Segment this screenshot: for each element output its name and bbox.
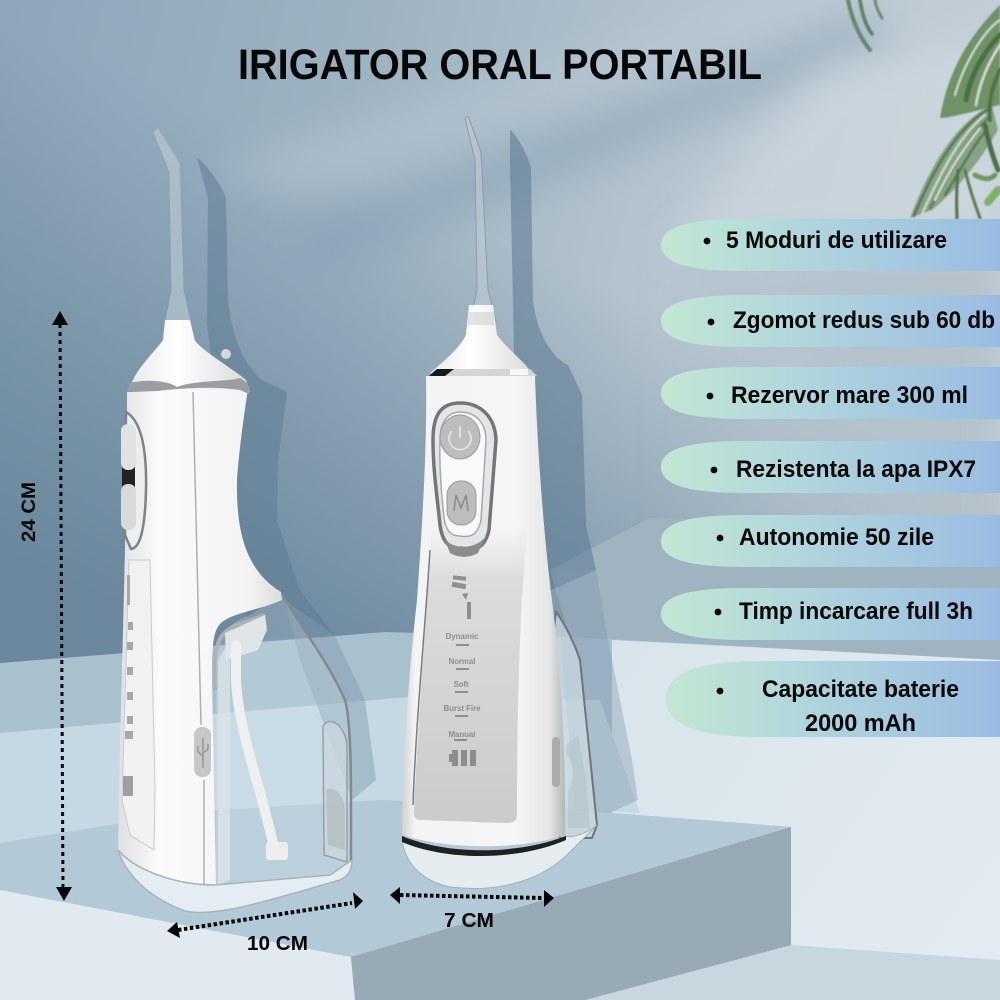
depth label: 7 CM	[444, 910, 494, 932]
tank behind body	[545, 612, 597, 838]
knob	[221, 349, 231, 359]
height label: 24 CM	[19, 482, 40, 542]
feature pill 4: Rezistenta la apa IPX7	[736, 456, 976, 483]
shadow of left device on wall	[197, 158, 335, 640]
inner connector	[225, 615, 267, 660]
mode labels	[444, 632, 481, 741]
nozzle	[465, 116, 496, 322]
tube tip	[266, 842, 288, 860]
inner wall	[218, 640, 230, 885]
feature pill 6: Timp incarcare full 3h	[739, 598, 973, 625]
chrome lower bracket	[444, 536, 486, 557]
feature pill 5: Autonomie 50 zile	[739, 524, 934, 551]
seam line	[193, 392, 204, 885]
water tube	[236, 645, 274, 848]
head cone	[430, 305, 532, 373]
chrome collar	[127, 378, 250, 394]
panel left edge	[413, 550, 430, 805]
mode labels: Burst Fire	[444, 704, 481, 713]
shadow of right device on wall	[510, 130, 596, 600]
shadow of left device on floor	[285, 600, 376, 800]
transparent tank	[216, 594, 351, 897]
inner arch	[214, 615, 265, 690]
base dark ring	[402, 836, 566, 856]
feature pill 7	[666, 661, 1000, 737]
mode labels: Soft	[454, 680, 469, 689]
mode labels: Normal	[448, 657, 476, 666]
mode labels: Manual	[448, 730, 476, 739]
feature pill 7: Capacitate baterie	[762, 676, 959, 703]
plant fronds	[848, 0, 1000, 218]
nozzle	[154, 129, 190, 322]
battery icon	[449, 750, 476, 766]
cone reflection	[468, 312, 494, 325]
feature pill 3	[661, 367, 1000, 419]
spray icon	[452, 575, 471, 619]
usb glyph	[198, 738, 208, 768]
shadow of right device on floor	[555, 570, 638, 812]
feature pill 1: 5 Moduri de utilizare	[726, 227, 947, 254]
depth arrow 7 cm	[390, 887, 554, 907]
background: wall	[0, 0, 1000, 700]
width label: 10 CM	[247, 933, 308, 955]
background: floor and steps	[0, 518, 1000, 1000]
feature pill 4	[661, 441, 1000, 493]
feature pill 5	[661, 515, 1000, 567]
mode button	[447, 481, 476, 525]
right device, front view	[402, 116, 597, 888]
feature pill 7: 2000 mAh	[805, 710, 916, 737]
side front panel edge	[122, 560, 155, 850]
control buttons side	[125, 412, 146, 549]
chrome button surround	[433, 403, 496, 549]
body	[402, 376, 565, 846]
feature pill 1	[661, 219, 1000, 271]
height arrow 24 cm	[52, 311, 72, 901]
grey front panel	[414, 525, 528, 823]
left device, side view	[118, 129, 352, 913]
feature pill 3: Rezervor mare 300 ml	[731, 382, 968, 409]
tank inner part	[566, 735, 590, 828]
feature pill 2	[661, 295, 1000, 347]
chrome inner highlight	[440, 412, 486, 537]
transparent base	[118, 850, 352, 913]
base dome	[402, 825, 597, 888]
title: IRIGATOR ORAL PORTABIL	[238, 41, 762, 89]
mode labels: Dynamic	[446, 632, 479, 641]
head cone	[130, 320, 250, 392]
usb port	[194, 727, 211, 777]
side labels	[123, 575, 133, 796]
side body	[118, 388, 282, 888]
power button	[440, 415, 480, 459]
usb port side	[552, 737, 560, 787]
feature pill 6	[661, 588, 1000, 640]
inner filter piece	[323, 721, 347, 862]
width arrow 10 cm	[167, 892, 363, 938]
chrome collar	[429, 369, 537, 376]
